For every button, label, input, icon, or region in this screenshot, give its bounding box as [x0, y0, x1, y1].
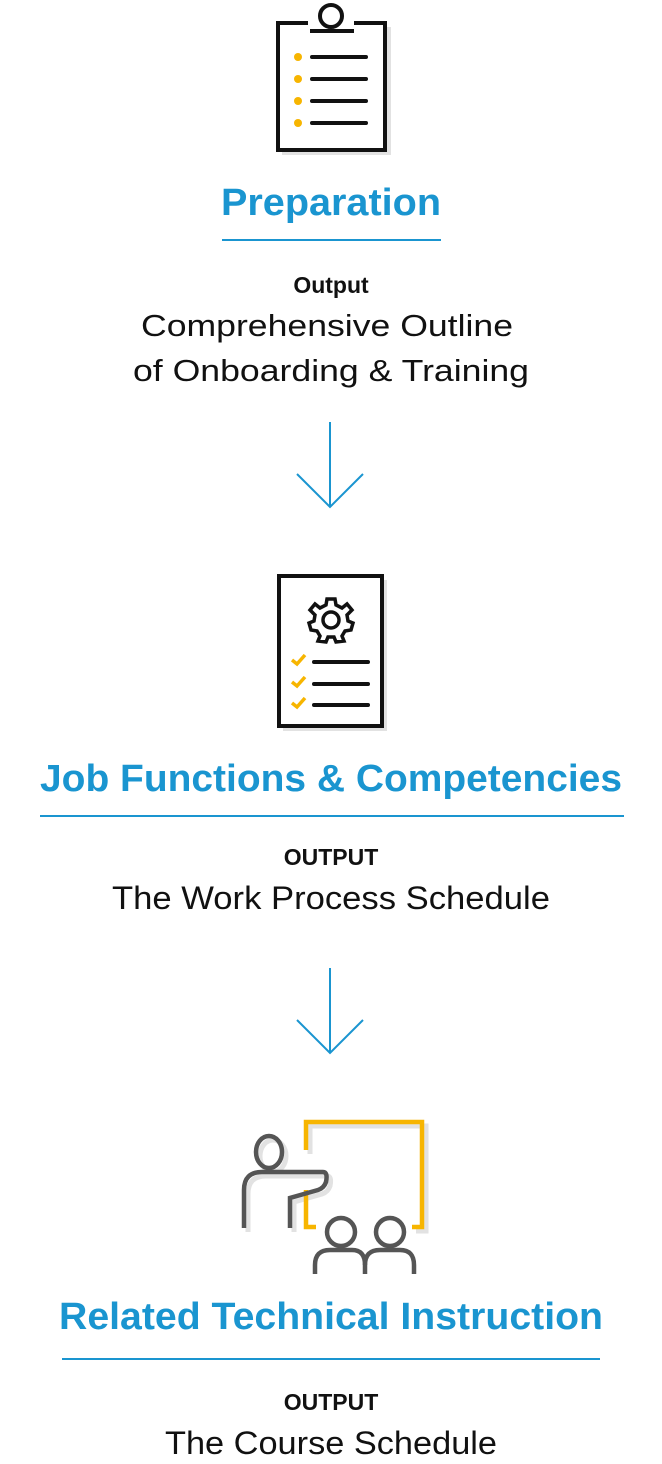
- heading: Job Functions & Competencies: Job Functions & Competencies: [40, 758, 622, 800]
- text: preparation output: Comprehensive Outline: [141, 308, 513, 343]
- text: job functions output: OUTPUT: [284, 844, 378, 870]
- heading: Preparation: Preparation: [221, 182, 441, 224]
- icon: document with gear: [279, 576, 387, 731]
- heading: Related Technical Instruction: Related Technical Instruction: [59, 1296, 603, 1338]
- text: RTI output: [165, 1389, 497, 1461]
- arrow 2: [297, 968, 363, 1053]
- text: preparation output: [133, 272, 529, 388]
- text: RTI output: The Course Schedule: [165, 1425, 497, 1461]
- icon: teacher with students: [244, 1122, 426, 1274]
- text: RTI output: OUTPUT: [284, 1389, 378, 1415]
- text: job functions output: The Work Process Schedule: [112, 880, 550, 916]
- icon: clipboard: [278, 5, 391, 155]
- text: preparation output: of Onboarding & Training: [133, 353, 529, 388]
- text: preparation output: Output: [293, 272, 369, 298]
- text: job functions output: [112, 844, 550, 916]
- arrow 1: [297, 422, 363, 507]
